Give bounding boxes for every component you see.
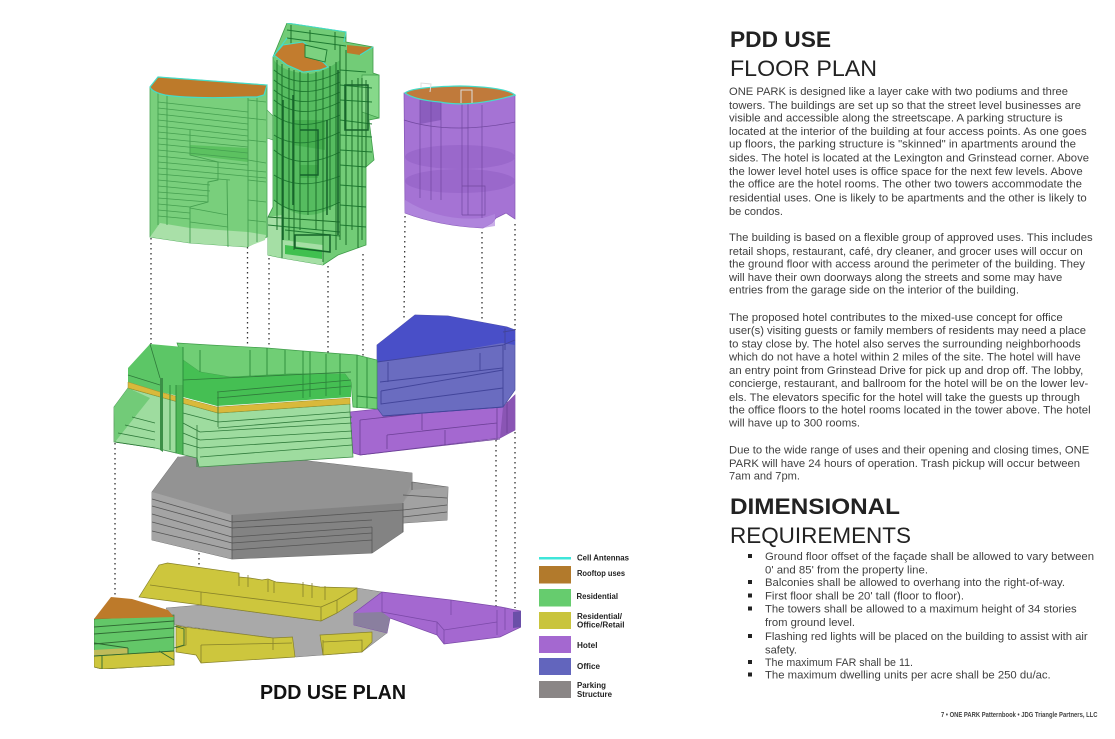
hotel level xyxy=(350,395,515,455)
legend: residential/office/retail: Office/Retail xyxy=(577,620,624,630)
ground level south retail xyxy=(176,625,372,663)
text block: layer cake overview: residential uses. One is likely to be apartments and the other is likely to xyxy=(729,193,1087,205)
text block: layer cake overview: ONE PARK is designed like a layer cake with two podiums and three xyxy=(729,86,1068,98)
dotted alignment lines xyxy=(115,216,515,645)
bullet list: dimensional requirements: The maximum dwelling units per acre shall be 250 du/ac. xyxy=(765,670,1051,682)
corner building xyxy=(94,597,184,669)
legend: cell antennas xyxy=(539,554,630,562)
text block: proposed hotel: the office floors to the hotel rooms located in the tower above. The hotel xyxy=(729,405,1091,417)
text block: proposed hotel: which do not have a hotel within 2 miles of the site. The hotel will have xyxy=(728,352,1081,364)
bullet list: dimensional requirements: The maximum FAR shall be 11. xyxy=(765,657,913,669)
text block: proposed hotel: els. The elevators specific for the hotel will take the guests up through xyxy=(729,392,1080,404)
legend: residential xyxy=(539,589,618,606)
legend: parking structure xyxy=(539,681,613,699)
legend: rooftop uses: Rooftop uses xyxy=(577,569,626,578)
rooftop of hotel tower xyxy=(405,86,515,104)
axonometric diagram: PDD use plan xyxy=(94,23,521,669)
text block: hours of operation: Due to the wide range of uses and their opening and closing times, ONE xyxy=(729,445,1089,457)
text block: proposed hotel: The proposed hotel contributes to the mixed-use concept for office xyxy=(729,312,1063,324)
text block: layer cake overview: up floors, the parking structure is "skinned" in apartments around the xyxy=(729,139,1076,151)
bullet list: dimensional requirements xyxy=(748,551,1094,682)
text block: proposed hotel: user(s) visiting guests or family members of residents may need a place xyxy=(729,325,1086,337)
residential podium xyxy=(114,343,377,467)
text block: proposed hotel xyxy=(728,312,1091,430)
heading: dimensional requirements: REQUIREMENTS xyxy=(730,523,911,548)
legend: rooftop uses xyxy=(539,566,626,584)
legend: hotel xyxy=(539,636,598,653)
text block: approved uses: entries from the garage side on the interior of the building. xyxy=(729,285,1019,297)
text block: proposed hotel: to stay close by. The hotel also serves the surrounding neighborhoods xyxy=(729,339,1081,351)
legend: parking structure: Structure xyxy=(577,690,613,699)
text block: layer cake overview: visible and accessible along the streetscape. A parking structure is xyxy=(729,113,1063,125)
heading: PDD use floor plan: FLOOR PLAN xyxy=(730,56,877,81)
legend: office: Office xyxy=(577,662,601,671)
legend: residential/office/retail xyxy=(539,612,624,630)
legend xyxy=(539,554,630,699)
bullet list: dimensional requirements: 0' and 85' from the property line. xyxy=(765,564,928,576)
text block: hours of operation: 7am and 7pm. xyxy=(729,471,800,483)
bullet list: dimensional requirements: The towers shall be allowed to a maximum height of 34 stories xyxy=(765,604,1077,616)
text block: hours of operation xyxy=(729,445,1089,483)
text block: approved uses xyxy=(728,232,1093,297)
legend: hotel: Hotel xyxy=(577,641,598,650)
left residential tower xyxy=(150,77,282,247)
ground level hotel xyxy=(354,592,521,644)
bullet list: dimensional requirements: Ground floor offset of the façade shall be allowed to vary between xyxy=(765,551,1094,563)
text block: proposed hotel: will have up to 300 rooms. xyxy=(728,418,860,430)
ground level parking xyxy=(166,588,387,657)
legend: residential/office/retail: Residential/ xyxy=(577,612,623,621)
heading: PDD use floor plan xyxy=(730,27,877,81)
text block: approved uses: The building is based on a flexible group of approved uses. This includes xyxy=(729,232,1093,244)
text block: layer cake overview: be condos. xyxy=(729,206,783,218)
rooftop xyxy=(150,77,267,98)
bullet list: dimensional requirements: Flashing red lights will be placed on the building to assist with air xyxy=(765,631,1088,643)
heading: dimensional requirements xyxy=(730,494,911,548)
text block: layer cake overview: the lower level hotel uses is office space for the next few levels. Above xyxy=(729,166,1083,178)
rooftop of center tower xyxy=(274,42,328,72)
center residential tower xyxy=(268,23,379,265)
text block: proposed hotel: concierge, restaurant, and ballroom for the hotel will be on the lower lev- xyxy=(729,378,1089,390)
legend: residential: Residential xyxy=(576,592,618,601)
office level xyxy=(377,315,515,416)
bullet list: dimensional requirements: Balconies shall be allowed to overhang into the right-of-way. xyxy=(765,577,1065,589)
text block: layer cake overview: towers. The buildings are set up so that the street level businesses are xyxy=(729,100,1081,112)
rooftop of corner building xyxy=(94,597,174,619)
text block: layer cake overview: located at the interior of the building at four access points. As one goes xyxy=(729,126,1087,138)
text block: layer cake overview: sides. The hotel is located at the Lexington and Grinstead corner. Above xyxy=(729,153,1089,165)
heading: PDD use floor plan: PDD USE xyxy=(730,27,831,52)
text block: layer cake overview xyxy=(729,86,1089,218)
parking structure level xyxy=(152,451,448,559)
text block: approved uses: will have their own doorways along the streets and some may have xyxy=(728,272,1062,284)
text block: proposed hotel: an entry point from Grinstead Drive for pick up and drop off. The lobby, xyxy=(729,365,1083,377)
ground level north retail xyxy=(139,563,357,621)
text block: approved uses: retail shops, restaurant, café, dry cleaner, and grocer uses will occur on xyxy=(729,246,1083,258)
heading: dimensional requirements: DIMENSIONAL xyxy=(730,494,900,519)
bullet list: dimensional requirements: safety. xyxy=(765,644,797,656)
right hotel tower xyxy=(404,83,515,228)
text block: hours of operation: PARK will have 24 hours of operation. Trash pickup will occur between xyxy=(729,458,1080,470)
bullet list: dimensional requirements: First floor shall be 20' tall (floor to floor). xyxy=(765,590,964,602)
legend: cell antennas: Cell Antennas xyxy=(577,554,630,562)
legend: office xyxy=(539,658,601,675)
text block: layer cake overview: the office are the hotel rooms. The other two towers accommodate the xyxy=(729,179,1082,191)
bullet list: dimensional requirements: from ground level. xyxy=(765,617,855,629)
text block: approved uses: the ground floor with access around the perimeter of the building. They xyxy=(729,259,1086,271)
diagram title: PDD USE PLAN xyxy=(260,682,406,704)
legend: parking structure: Parking xyxy=(577,681,606,690)
